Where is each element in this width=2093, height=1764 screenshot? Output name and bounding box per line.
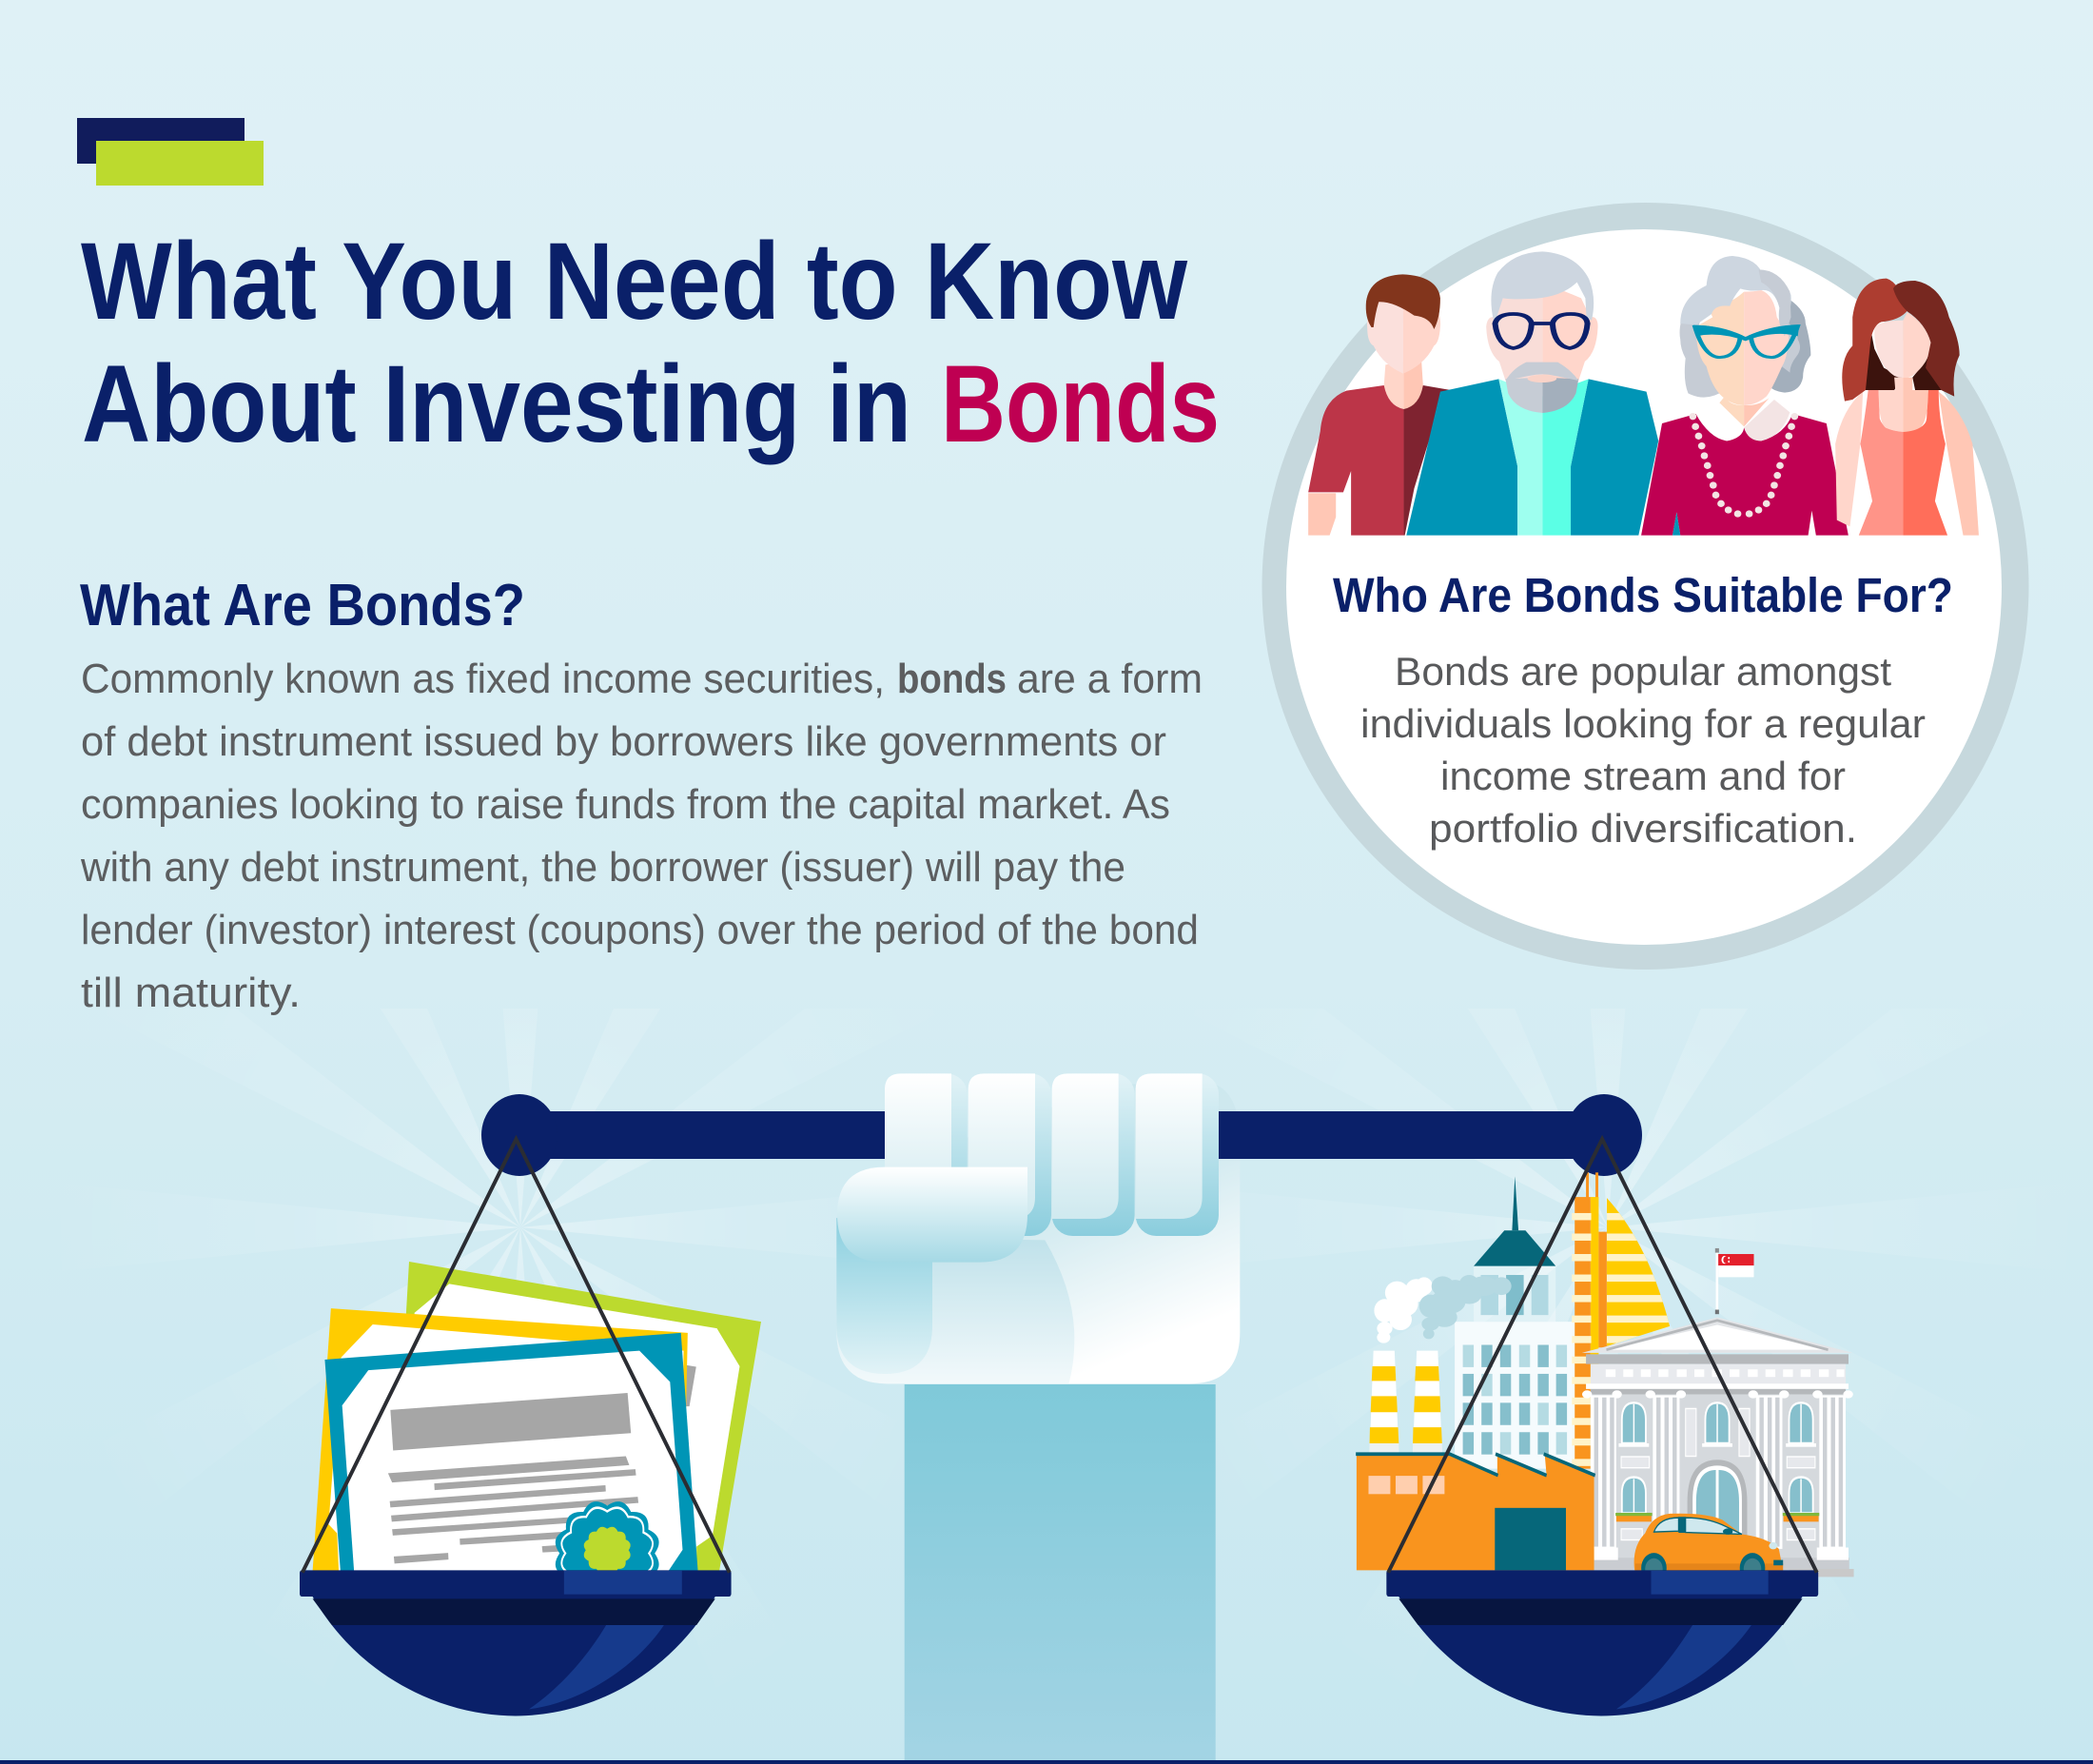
heading: who are bonds suitable for: Who Are Bonds Suitable For? — [1333, 568, 1953, 622]
certificate: yellow — [313, 1308, 688, 1571]
text block: bonds definition — [80, 656, 1203, 1016]
pan strings — [303, 1139, 730, 1573]
singapore flag — [1715, 1248, 1754, 1314]
thumb — [837, 1167, 1027, 1263]
circle ring — [1262, 203, 2028, 970]
person: older woman — [1641, 256, 1848, 536]
certificate: green — [391, 1262, 761, 1571]
background rays — [36, 696, 2092, 1758]
sail skyscraper — [1572, 1172, 1673, 1469]
finger 4 — [1136, 1073, 1219, 1236]
scale beam left — [481, 1094, 885, 1176]
text block: bonds definition: Commonly known as fixed income securities, — [81, 656, 885, 702]
right scale pan with city and government — [1356, 1139, 1854, 1715]
circle interior — [1286, 229, 2002, 945]
left scale pan with bond certificates — [300, 1139, 761, 1715]
text block: bonds definition: are a form — [1017, 656, 1203, 702]
text block: bonds definition: of debt instrument issued by borrowers like governments or — [81, 718, 1166, 765]
pan bowl — [300, 1570, 732, 1715]
arm — [905, 1384, 1216, 1760]
text block: suitability: portfolio diversification. — [1429, 806, 1857, 851]
person: older man — [1406, 251, 1658, 536]
title: Bonds — [941, 343, 1220, 465]
certificate: blue — [324, 1333, 698, 1571]
smoke — [1374, 1275, 1512, 1343]
person: young woman — [1835, 279, 1979, 536]
seal — [556, 1501, 659, 1605]
text block: bonds definition: with any debt instrument, the borrower (issuer) will pay the — [80, 844, 1125, 891]
car — [1634, 1514, 1783, 1583]
finger 3 — [1052, 1073, 1135, 1236]
people illustration — [1308, 251, 1979, 536]
logo accent bars — [77, 118, 264, 186]
pan bowl — [1386, 1570, 1818, 1715]
text block: suitability: individuals looking for a regular — [1360, 701, 1926, 746]
text block: suitability: income stream and for — [1440, 754, 1846, 798]
bottom rule — [0, 1760, 2093, 1764]
person: young man — [1308, 274, 1451, 536]
panel: who are bonds suitable for — [1262, 203, 2028, 970]
finger 2 — [968, 1073, 1051, 1236]
scale beam right — [1219, 1094, 1642, 1176]
text block: bonds definition: companies looking to raise funds from the capital market. As — [81, 781, 1170, 828]
text block: bonds definition: lender (investor) interest (coupons) over the period of the bond — [81, 907, 1199, 953]
palm — [836, 1084, 1240, 1383]
text block: suitability: Bonds are popular amongst — [1395, 649, 1891, 694]
title — [81, 221, 1220, 465]
title: About Investing in — [82, 343, 911, 465]
text block: bonds definition: bonds — [897, 656, 1007, 702]
thumb shadow — [836, 1218, 932, 1374]
office tower — [1455, 1176, 1576, 1469]
title: What You Need to Know — [81, 221, 1187, 343]
finger 1 — [885, 1073, 968, 1236]
government building — [1582, 1317, 1854, 1577]
text block: suitability — [1360, 649, 1926, 851]
chimneys — [1370, 1351, 1442, 1453]
factory — [1356, 1454, 1595, 1570]
fist — [836, 1073, 1240, 1383]
heading: what are bonds: What Are Bonds? — [80, 573, 525, 638]
text block: bonds definition: till maturity. — [81, 970, 301, 1016]
pan strings — [1388, 1139, 1817, 1573]
